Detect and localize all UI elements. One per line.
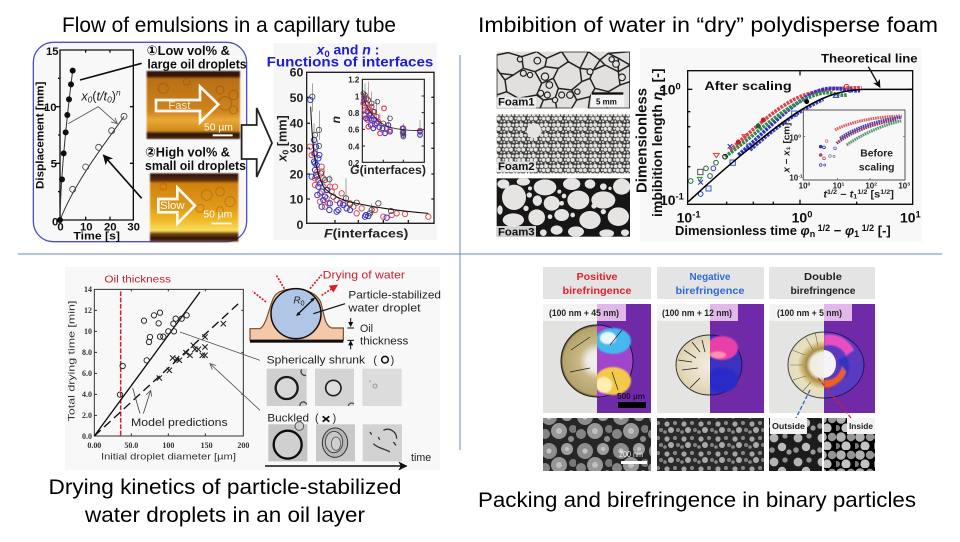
x axis label: φ <box>845 223 854 238</box>
panel: imbibition chart <box>640 48 922 242</box>
inset tick labels: 2 <box>874 182 877 188</box>
cross symbol <box>315 412 336 424</box>
composition label: (100 nm + 5 nm) <box>777 308 842 319</box>
y tick labels: 12 <box>84 306 92 315</box>
water droplet <box>271 289 321 339</box>
y axis label: Dimensionless: Dimensionless <box>634 88 650 193</box>
axis labels <box>34 46 140 243</box>
inset blue data <box>362 98 422 137</box>
inset black data <box>361 91 406 139</box>
micrograph: Foam2 <box>497 114 630 173</box>
theoretical line label: Theoretical line <box>821 53 918 66</box>
buckled image 3 <box>363 424 402 461</box>
after scaling label: After scaling <box>704 79 792 93</box>
inset x label: G(interfaces) <box>350 164 426 177</box>
y tick labels: 0.0 <box>82 432 92 441</box>
title: packing and birefringence: Packing and birefringence in binary particles <box>478 488 916 512</box>
fit curve <box>311 107 428 213</box>
fit equation: x <box>81 89 88 103</box>
header <box>769 267 875 299</box>
main tick labels: 10 <box>900 210 916 226</box>
title: drying kinetics second line: water droplets in an oil layer <box>84 503 365 527</box>
Foam3 label: Foam3 <box>498 227 535 239</box>
Foam1 label: Foam1 <box>498 97 535 109</box>
x axis label: [-] <box>874 223 891 238</box>
inset x label: 1/2 <box>827 189 838 196</box>
axis labels: 30 <box>127 221 140 233</box>
inset x label: 1/2 <box>880 189 891 196</box>
panel: drying kinetics background <box>65 267 440 470</box>
axis labels: Displacement [mm] <box>34 81 46 189</box>
label: high vol%: ②High vol% & <box>145 145 230 160</box>
panel: drying time chart <box>66 275 260 462</box>
SEM image: 200 nm <box>619 450 643 459</box>
composition label: (100 nm + 12 nm) <box>662 308 732 319</box>
theoretical line arrow <box>868 67 880 87</box>
title: drying kinetics: Drying kinetics of particle-stabilized <box>48 475 402 499</box>
x axis label: 1/2 <box>815 223 830 233</box>
axis labels: 0 <box>57 221 64 233</box>
oil thickness label: Oil <box>360 323 373 335</box>
panel heading: x <box>316 41 326 57</box>
inset low-end points <box>819 140 836 166</box>
Foam2 label: Foam2 <box>498 161 535 173</box>
scatter points <box>688 84 852 196</box>
red data <box>307 144 431 219</box>
main scatter tick labels: 10 <box>290 192 303 206</box>
inset tick labels: 1 <box>842 182 845 188</box>
SEM image: outside: Outside <box>772 421 805 431</box>
inset chart: n vs G <box>329 76 426 177</box>
main tick labels: -1 <box>692 209 701 219</box>
scale bar: 5 mm <box>596 97 617 106</box>
header: Negative <box>690 271 731 283</box>
title: foam imbibition: Imbibition of water in “dry” polydisperse foam <box>478 13 938 37</box>
panel: foam micrographs <box>497 52 630 239</box>
micrograph: fast flow: 50 µm <box>204 122 233 133</box>
model prediction arrows <box>133 388 151 414</box>
time arrow <box>265 464 407 468</box>
inset red data <box>361 94 422 136</box>
label: small droplets: small oil droplets <box>145 158 246 173</box>
SEM image: outside <box>769 418 822 471</box>
inset y label: n <box>329 116 343 123</box>
header: birefringence <box>790 285 856 297</box>
spherically shrunk label: Spherically shrunk <box>267 355 366 367</box>
thickness marks <box>347 318 354 349</box>
y tick labels: 2.0 <box>82 411 92 420</box>
axes <box>94 289 243 436</box>
inset tick labels: 0.6 <box>348 126 360 135</box>
inset tick labels: 0.8 <box>348 109 360 118</box>
vertical divider <box>459 55 461 450</box>
main scatter axes <box>307 72 434 223</box>
x tick labels: 50.0 <box>124 441 138 450</box>
x axis label: 1 <box>854 229 859 239</box>
oil thickness line <box>118 291 123 436</box>
panel: displacement vs time <box>33 42 247 243</box>
inset y label: x − x₁ [cm] <box>781 123 791 174</box>
main scatter tick labels: 40 <box>290 117 303 131</box>
main scatter tick labels <box>290 66 303 232</box>
connector lines <box>796 390 810 418</box>
droplet label line 2: water droplet <box>347 302 421 314</box>
header <box>543 267 651 299</box>
axis labels: 0 <box>52 217 58 229</box>
inset tick labels <box>789 134 910 191</box>
y tick labels <box>82 285 92 441</box>
filled data points <box>57 68 76 223</box>
main axes <box>688 71 913 204</box>
plot background <box>640 48 922 242</box>
droplet image <box>769 304 875 418</box>
dashed model line <box>94 304 238 436</box>
pointer to droplet <box>313 304 345 314</box>
before scaling label line 2: scaling <box>859 163 894 174</box>
inset tick labels: 10 <box>833 182 842 191</box>
model lines <box>94 292 200 436</box>
panel: positive birefringence <box>543 267 651 471</box>
y tick labels: 4.0 <box>82 390 92 399</box>
panel heading <box>267 41 434 70</box>
axis labels: Time [s] <box>73 231 120 243</box>
red evaporation arrows <box>253 275 336 302</box>
y tick labels: 8.0 <box>82 348 92 357</box>
buckled image 2 <box>316 424 355 461</box>
panel heading: and <box>330 41 362 57</box>
x tick labels: 150 <box>201 441 213 450</box>
inset tick labels: 10 <box>789 134 798 143</box>
axis labels: 15 <box>46 46 59 58</box>
header <box>657 267 764 299</box>
oil layer <box>250 289 343 340</box>
inset fit curve <box>363 98 422 131</box>
panel heading: Functions of interfaces <box>267 54 434 70</box>
inset tick labels <box>348 76 360 168</box>
oil thickness label line 2: thickness <box>360 336 408 348</box>
y axis label x0: 0 <box>281 150 291 155</box>
radius label: 0 <box>301 299 305 308</box>
panel: functions of interfaces <box>267 41 437 240</box>
SEM image <box>543 418 651 471</box>
fit equation: ) <box>112 89 116 103</box>
arrow: outcome of experiments <box>242 108 272 177</box>
axis labels: 20 <box>104 221 117 233</box>
inset x label: [s <box>867 189 880 200</box>
y axis label: imbibition length: imbibition length η <box>649 92 665 217</box>
y axis label: imbibition length: [-] <box>649 68 665 86</box>
before scaling label: Before <box>860 149 893 160</box>
droplet label: Particle-stabilized <box>348 290 441 302</box>
circle symbol: ( <box>373 355 377 367</box>
x tick labels <box>87 441 249 450</box>
micrograph: Foam1 <box>497 52 630 109</box>
main tick labels <box>660 81 921 226</box>
y axis label x0: x <box>276 154 290 163</box>
main scatter tick labels: 0 <box>296 218 303 232</box>
y tick labels: 6.0 <box>82 369 92 378</box>
error bars <box>312 83 372 215</box>
axis labels: 10 <box>44 102 57 114</box>
oil thickness label: Oil thickness <box>104 275 171 286</box>
inset tick labels: 10 <box>789 174 798 183</box>
fit curves <box>60 71 124 220</box>
axis labels: 10 <box>80 221 93 233</box>
x tick labels: 200 <box>237 441 249 450</box>
panel: negative birefringence <box>657 267 764 471</box>
inset tick labels: -1 <box>798 174 803 180</box>
buckled image 1 <box>268 422 307 461</box>
panel heading: n : <box>362 41 379 57</box>
black arrows from labels <box>80 63 142 198</box>
fit equation: ( <box>92 89 97 103</box>
inset tick labels: 10 <box>799 182 808 191</box>
cross symbol: ( <box>315 412 319 424</box>
x tick labels: 100 <box>162 441 174 450</box>
scale bar: 500 µm <box>617 391 645 401</box>
fit equation: 0 <box>88 95 93 105</box>
droplet image <box>657 304 764 413</box>
micrograph: fast flow <box>147 71 240 139</box>
x tick labels: 0.00 <box>87 441 101 450</box>
SEM image: inside <box>824 418 875 471</box>
label: low vol%: ①Low vol% & <box>147 43 230 58</box>
pointer arrows <box>180 332 260 410</box>
micrograph: slow flow: Slow <box>160 200 185 212</box>
header: Positive <box>576 271 618 283</box>
inset x label: t <box>823 189 828 200</box>
main tick labels: 0 <box>676 81 681 91</box>
shrunk image 1 <box>267 369 307 406</box>
open circles <box>117 310 189 397</box>
inset tick labels: 10 <box>865 182 874 191</box>
fit equation: t/t <box>97 89 107 103</box>
radius arrowheads <box>296 298 315 316</box>
circle symbol <box>373 355 394 367</box>
droplet image <box>543 304 651 413</box>
inset x label: 1 <box>853 194 858 201</box>
fit equation: n <box>116 88 121 98</box>
axis labels: 5 <box>51 159 57 171</box>
cross symbol: ) <box>333 412 336 424</box>
gray arrows to curves <box>68 107 117 124</box>
y axis label: Total drying time [min] <box>66 301 76 421</box>
micrograph: slow flow: 50 µm <box>203 210 232 221</box>
inset tick labels: 3 <box>907 182 910 188</box>
x axis label: Initial droplet diameter [µm] <box>101 452 236 462</box>
fit equation: 0 <box>107 95 112 105</box>
main tick labels: 10 <box>660 82 676 98</box>
main tick labels: 10 <box>792 210 807 226</box>
main tick labels: 10 <box>660 192 676 208</box>
theoretical line <box>688 89 913 202</box>
y tick labels: 14 <box>84 285 92 294</box>
y axis label x0: [mm] <box>276 115 290 150</box>
composition label: (100 nm + 45 nm) <box>549 308 619 319</box>
y axis label: imbibition length: n <box>657 86 667 92</box>
horizontal divider <box>18 253 942 255</box>
scatter band <box>725 88 862 157</box>
substrate <box>250 340 343 343</box>
buckled label: Buckled <box>267 412 309 424</box>
red connector line <box>818 378 851 418</box>
inset x label: 1/2 <box>857 189 868 196</box>
inset error bars <box>365 82 420 138</box>
chart axes <box>56 50 133 220</box>
main tick labels: 0 <box>807 209 812 219</box>
inset: before scaling <box>781 110 910 201</box>
inset tick labels: 0 <box>798 134 801 140</box>
main scatter axis labels: F(interfaces) <box>324 226 408 240</box>
main tick labels: -1 <box>676 192 684 202</box>
header: Double <box>804 271 842 283</box>
main scatter tick labels: 60 <box>290 66 303 80</box>
main tick labels: 10 <box>677 210 692 226</box>
micrograph: fast flow: Fast <box>168 100 191 112</box>
x axis label: 1/2 <box>859 223 874 233</box>
x axis label: Dimensionless time φ <box>675 223 810 238</box>
main scatter tick labels: 30 <box>290 142 303 156</box>
inset data <box>835 116 902 145</box>
header: birefringence <box>562 285 632 297</box>
inset tick labels: 1.2 <box>348 76 360 85</box>
panel: droplet schematic <box>250 270 441 466</box>
main scatter tick labels: 50 <box>290 91 303 105</box>
radius label: R <box>293 296 301 307</box>
model predictions label: Model predictions <box>131 417 228 429</box>
inset x label: − <box>837 189 850 200</box>
blue data <box>308 97 389 220</box>
inset tick labels: 0 <box>808 182 811 188</box>
shrunk image 3 <box>362 369 402 406</box>
micrograph: slow flow <box>150 173 238 242</box>
inset x label: ] <box>890 189 894 200</box>
SEM image: inside: Inside <box>849 421 873 431</box>
circle symbol: ) <box>391 355 394 367</box>
header: birefringence <box>676 285 745 297</box>
label: large droplets: large oil droplets <box>147 56 247 71</box>
main tick labels: 1 <box>916 209 921 219</box>
x axis label: − <box>830 223 845 238</box>
inset tick labels: 0.4 <box>348 142 360 151</box>
radius arrow <box>297 299 314 315</box>
inset tick labels: 0.2 <box>348 159 360 168</box>
y tick labels: 10 <box>84 327 92 336</box>
black data <box>310 94 394 216</box>
panel: double birefringence <box>769 267 875 471</box>
title: capillary flow: Flow of emulsions in a capillary tube <box>62 13 396 37</box>
inset tick labels: 1 <box>355 92 360 101</box>
drying of water label: Drying of water <box>323 270 406 282</box>
main scatter tick labels: 20 <box>290 167 303 181</box>
SEM image <box>657 418 764 471</box>
panel heading: 0 <box>324 49 330 59</box>
inset x label: t <box>850 189 854 200</box>
inset tick labels: 10 <box>898 182 907 191</box>
x axis label: n <box>810 229 815 239</box>
micrograph: Foam3 <box>497 178 630 239</box>
time label: time <box>411 452 431 464</box>
shrunk image 2 <box>315 369 354 406</box>
cross markers <box>157 321 226 381</box>
open data points <box>70 113 127 192</box>
